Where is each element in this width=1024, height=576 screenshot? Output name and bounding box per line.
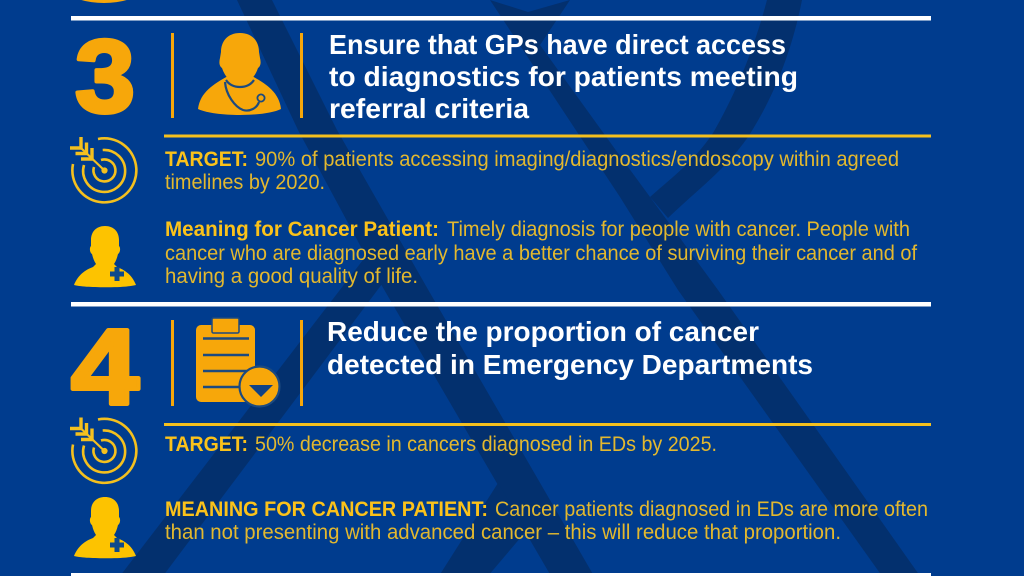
heading: to diagnostics for patients meeting	[329, 61, 798, 92]
previous section number remnant	[71, 0, 137, 3]
heading: detected in Emergency Departments	[327, 349, 813, 380]
target text: TARGET:	[165, 147, 248, 171]
heading: Reduce the proportion of cancer	[327, 316, 759, 347]
heading: Ensure that GPs have direct access	[329, 29, 786, 60]
meaning text: MEANING FOR CANCER PATIENT:	[165, 497, 488, 521]
icon: target with arrow	[70, 137, 136, 202]
heading	[327, 316, 813, 380]
target text: timelines by 2020.	[165, 170, 325, 194]
heading: referral criteria	[329, 93, 529, 124]
background: awareness ribbon	[120, 0, 920, 576]
icon: clipboard with down arrow	[196, 318, 280, 406]
meaning text: than not presenting with advanced cancer – this will reduce that proportion.	[165, 520, 841, 544]
section 4	[70, 306, 931, 558]
icon: target with arrow	[70, 418, 136, 483]
meaning text: having a good quality of life.	[165, 264, 418, 288]
meaning text: Timely diagnosis for people with cancer. People with	[447, 217, 910, 241]
icon: patient with cross	[74, 497, 136, 558]
meaning text	[165, 217, 917, 288]
heading	[329, 29, 798, 124]
section 3	[70, 19, 931, 288]
target text	[165, 147, 899, 194]
target text: TARGET:	[165, 432, 248, 456]
meaning text: Cancer patients diagnosed in EDs are more often	[495, 497, 928, 521]
number 4: 4	[71, 306, 139, 427]
meaning text: cancer who are diagnosed early have a better chance of surviving their cancer and of	[165, 241, 917, 265]
target text: 50% decrease in cancers diagnosed in EDs by 2025.	[255, 432, 717, 456]
icon: patient with cross	[74, 226, 136, 287]
icon: doctor with stethoscope	[198, 33, 281, 115]
divider bars	[171, 320, 303, 406]
meaning text: Meaning for Cancer Patient:	[165, 217, 439, 241]
divider bars	[171, 33, 303, 118]
target text: 90% of patients accessing imaging/diagnostics/endoscopy within agreed	[255, 147, 899, 171]
number 3: 3	[75, 19, 135, 134]
meaning text	[165, 497, 928, 544]
